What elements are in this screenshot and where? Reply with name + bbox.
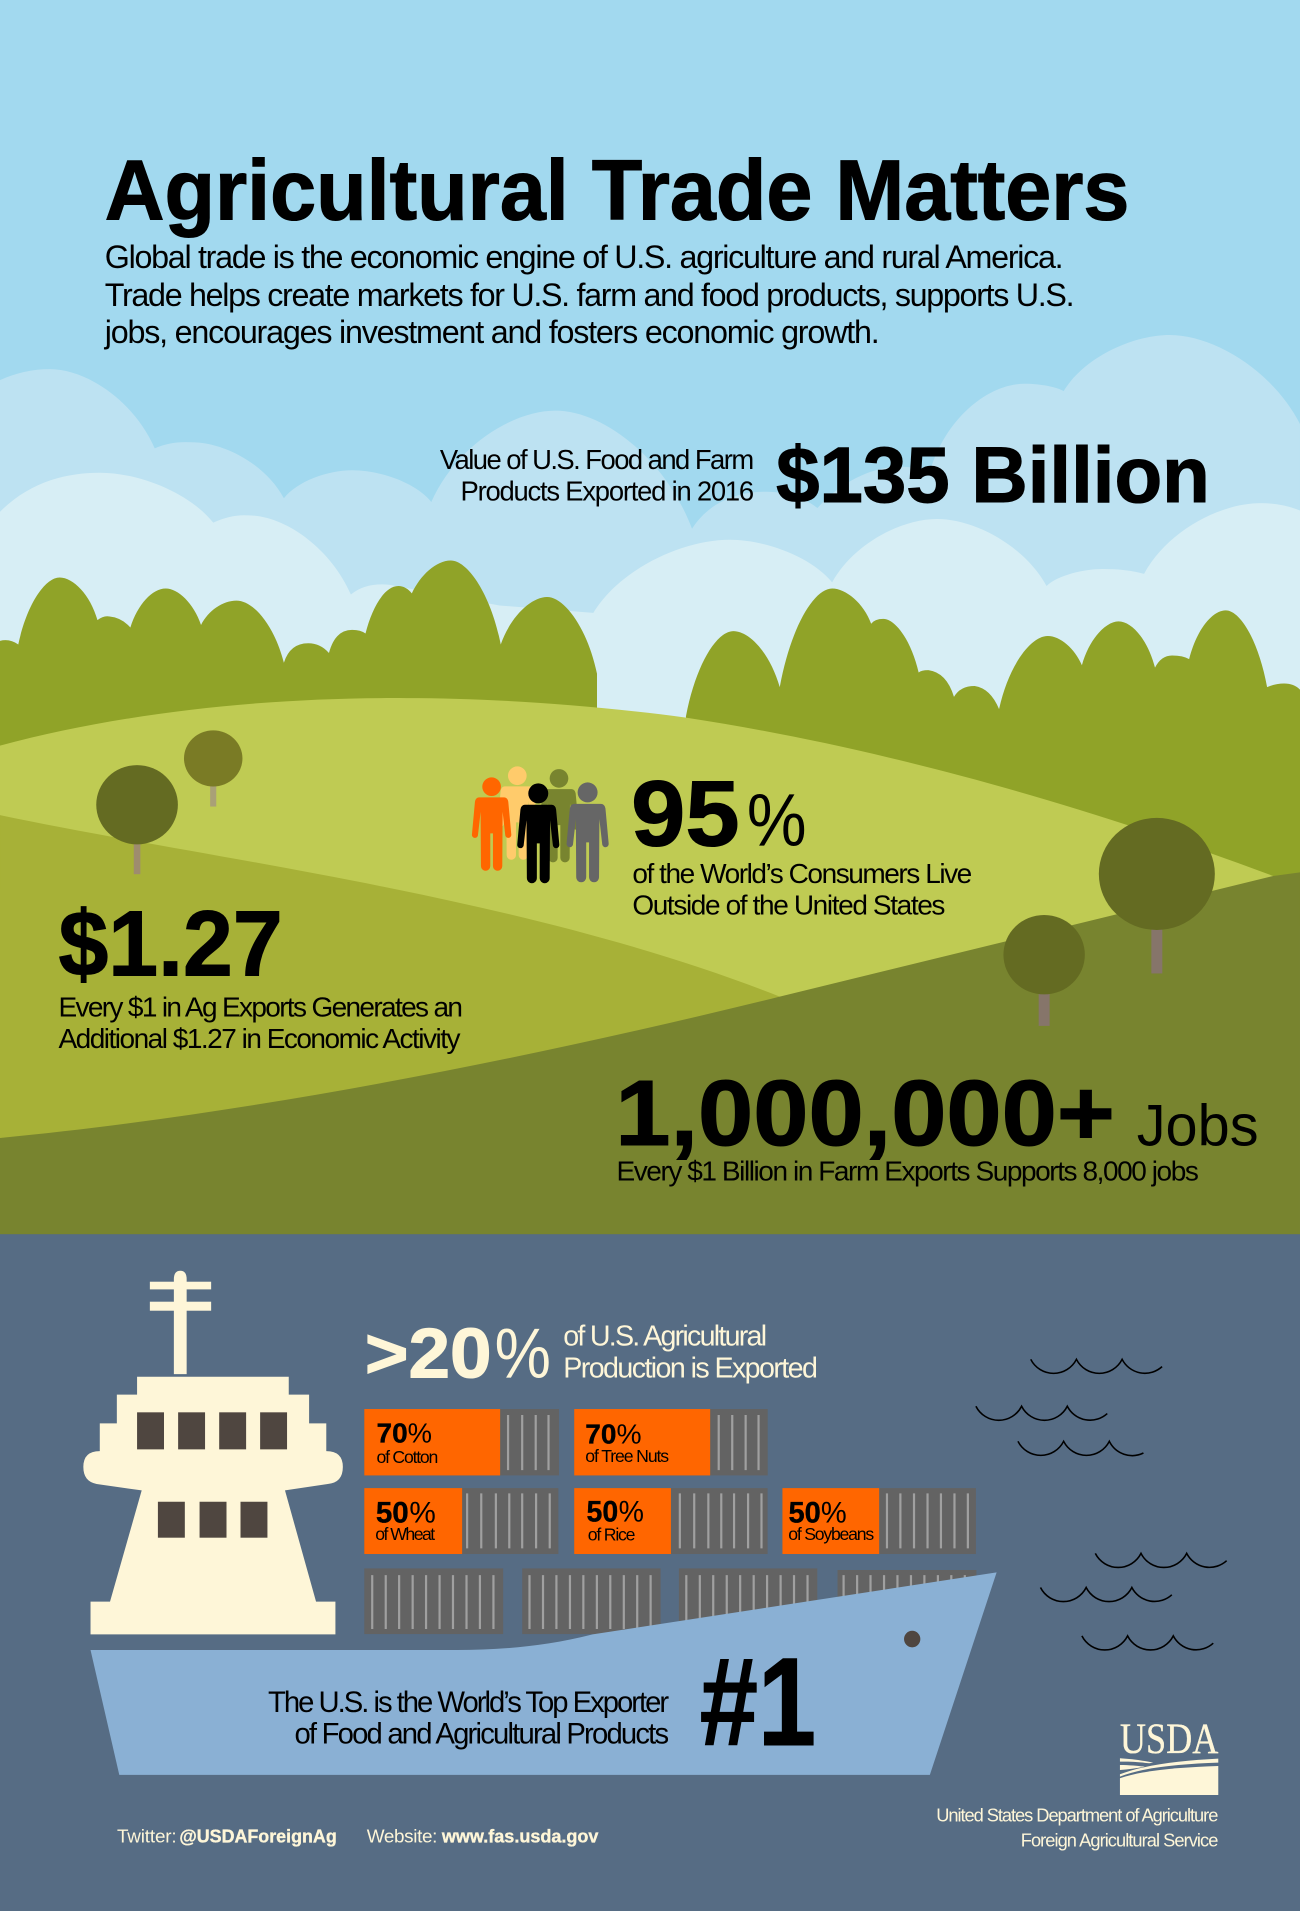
stat: economic activity multiplier: Every $1 in Ag Exports Generates an xyxy=(58,992,463,1023)
clouds: back layer xyxy=(0,335,1300,792)
title: Agricultural Trade Matters xyxy=(105,143,1129,238)
stat: top exporter: of Food and Agricultural Products xyxy=(294,1718,669,1750)
clouds: front layer xyxy=(0,473,1300,792)
container: 70% of cotton: 70 xyxy=(376,1418,408,1449)
stat: 95 percent of consumers: % xyxy=(747,779,807,862)
container: 50% of rice: % xyxy=(619,1497,644,1529)
footer: agency name xyxy=(936,1804,1218,1851)
container: 70% of cotton xyxy=(364,1409,559,1475)
logo: USDA xyxy=(1120,1715,1219,1795)
ship mast xyxy=(150,1271,211,1374)
intro paragraph: Trade helps create markets for U.S. farm and food products, supports U.S. xyxy=(105,277,1075,313)
stat: export value: Products Exported in 2016 xyxy=(461,476,754,507)
ocean background xyxy=(0,1234,1300,1911)
stat: jobs supported: 1,000,000+ xyxy=(615,1061,1115,1165)
footer: twitter and website: @USDAForeignAg xyxy=(179,1827,337,1848)
container: 70% of tree nuts: % xyxy=(616,1418,642,1449)
stat: top exporter xyxy=(268,1631,816,1772)
tree line: right cluster xyxy=(686,588,1300,926)
container: 50% of rice: of Rice xyxy=(588,1525,636,1545)
stat: economic activity multiplier: $1.27 xyxy=(58,891,283,995)
tree: large right tree xyxy=(1099,818,1215,973)
tree: right lower tree xyxy=(1003,915,1085,1026)
stat: share of production exported: >20 xyxy=(365,1313,492,1392)
container: 50% of rice xyxy=(574,1488,768,1554)
ship hull xyxy=(91,1572,997,1775)
mid green hill xyxy=(0,815,780,1218)
stat: share of production exported: Production is Exported xyxy=(563,1353,818,1385)
stat: economic activity multiplier: Additional $1.27 in Economic Activity xyxy=(58,1023,461,1054)
tree line: left cluster xyxy=(0,560,597,780)
footer: twitter and website: Twitter: xyxy=(117,1827,177,1848)
gray containers row xyxy=(364,1568,976,1634)
container: 70% of cotton: % xyxy=(408,1418,432,1449)
stat: export value: $135 Billion xyxy=(776,430,1210,519)
stat: share of production exported: of U.S. Agricultural xyxy=(563,1321,767,1353)
footer: agency name: Foreign Agricultural Service xyxy=(1021,1830,1218,1851)
container: 50% of soybeans xyxy=(782,1488,976,1554)
light green hill xyxy=(0,698,1273,1097)
stat: share of production exported xyxy=(365,1313,818,1392)
stat: top exporter: The U.S. is the World’s Top Exporter xyxy=(268,1687,669,1719)
stat: jobs supported xyxy=(615,1061,1259,1187)
intro paragraph xyxy=(104,239,1075,350)
stat: jobs supported: Every $1 Billion in Farm Exports Supports 8,000 jobs xyxy=(616,1156,1199,1187)
stat: 95 percent of consumers xyxy=(631,762,972,920)
container: 70% of cotton: of Cotton xyxy=(376,1447,438,1467)
footer: twitter and website xyxy=(117,1827,599,1848)
container: 50% of soybeans: % xyxy=(821,1497,847,1529)
dark green hill xyxy=(0,872,1300,1235)
ship porthole xyxy=(904,1631,920,1647)
container: 50% of soybeans: of Soybeans xyxy=(788,1524,874,1544)
footer: agency name: United States Department of Agriculture xyxy=(936,1804,1218,1825)
footer: twitter and website: www.fas.usda.gov xyxy=(441,1827,599,1848)
stat: jobs supported: Jobs xyxy=(1137,1093,1259,1158)
container: 70% of tree nuts: 70 xyxy=(585,1418,616,1449)
stat: export value xyxy=(440,430,1210,519)
waves xyxy=(976,1359,1227,1650)
intro paragraph: Global trade is the economic engine of U.S. agriculture and rural America. xyxy=(105,239,1064,275)
logo: USDA: USDA xyxy=(1120,1715,1219,1763)
container: 50% of rice: 50 xyxy=(587,1497,618,1529)
stat: share of production exported: % xyxy=(495,1313,551,1392)
stat: export value: Value of U.S. Food and Farm xyxy=(440,444,754,475)
stat: top exporter: #1 xyxy=(700,1631,816,1772)
container: 50% of wheat: % xyxy=(409,1497,436,1529)
container: 50% of wheat xyxy=(364,1488,558,1554)
ship bridge tower xyxy=(83,1377,343,1634)
stat: 95 percent of consumers: 95 xyxy=(631,762,740,866)
container: 70% of tree nuts xyxy=(574,1409,768,1475)
stat: 95 percent of consumers: Outside of the United States xyxy=(632,889,945,920)
container: 50% of wheat: 50 xyxy=(376,1497,409,1529)
stat: 95 percent of consumers: of the World’s Consumers Live xyxy=(632,858,972,889)
intro paragraph: jobs, encourages investment and fosters economic growth. xyxy=(104,314,880,350)
tree: small far hill tree xyxy=(184,730,242,807)
footer: twitter and website: Website: xyxy=(367,1827,437,1848)
container: 70% of tree nuts: of Tree Nuts xyxy=(585,1446,669,1466)
icon: group of people xyxy=(472,766,609,883)
stat: economic activity multiplier xyxy=(58,891,463,1054)
container: 50% of soybeans: 50 xyxy=(789,1497,821,1529)
container: 50% of wheat: of Wheat xyxy=(375,1524,435,1544)
tree: left hill tree xyxy=(96,765,178,874)
